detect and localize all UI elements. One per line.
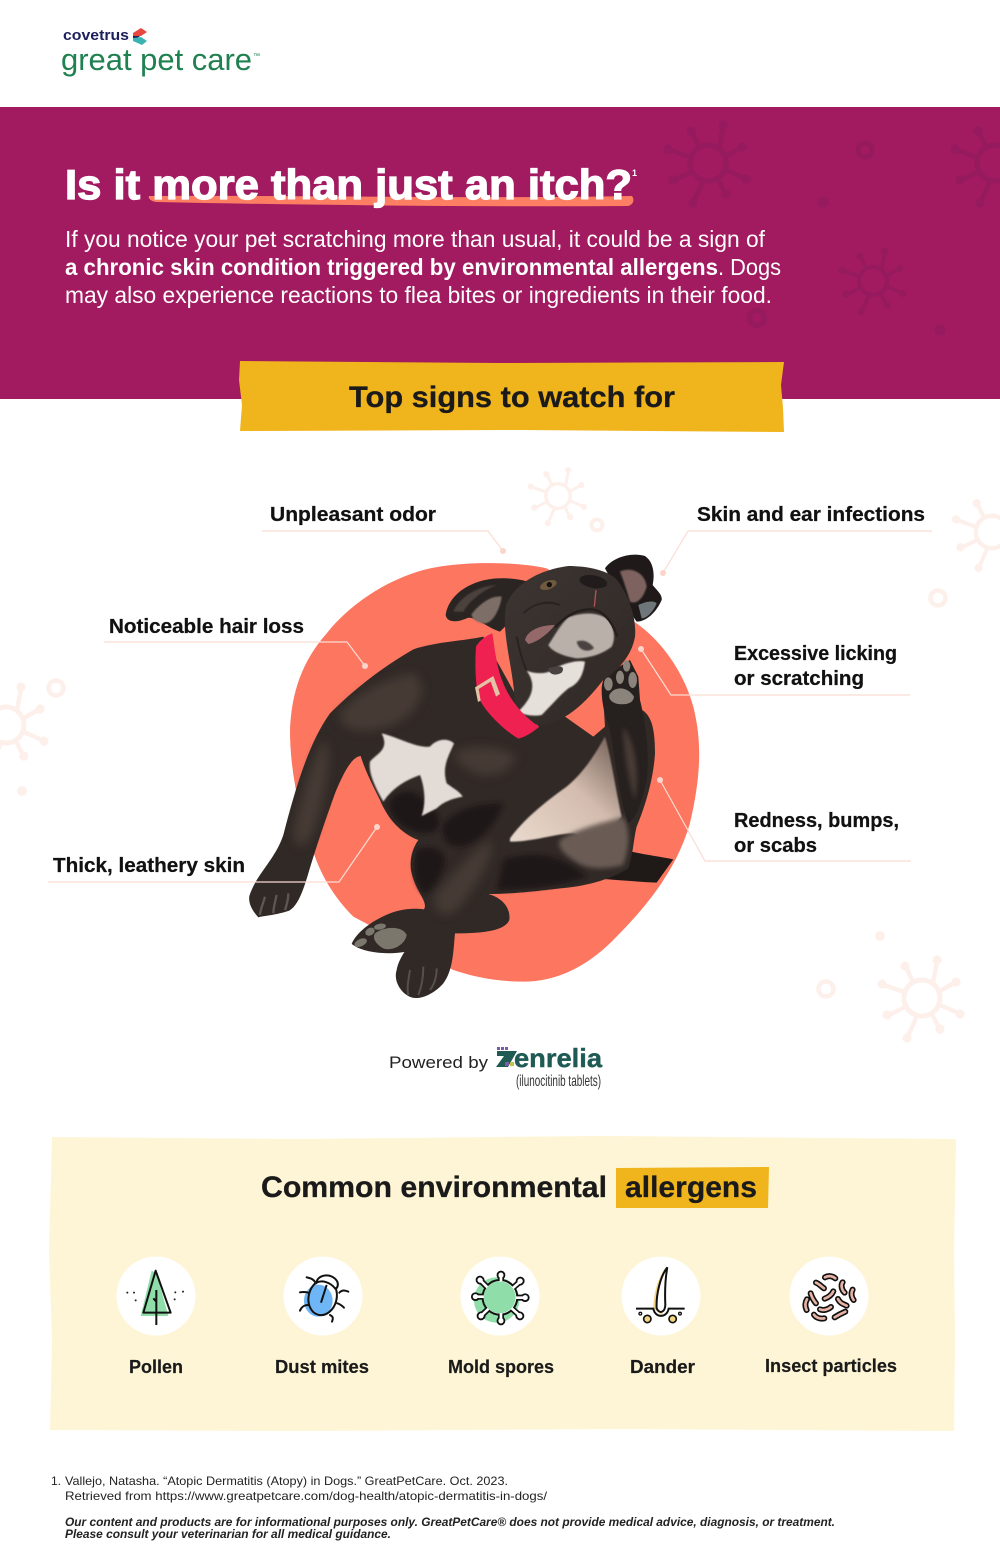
panel: purple hero [0, 107, 1000, 399]
intro paragraph: may also experience reactions to flea bites or ingredients in their food. [65, 282, 772, 308]
intro paragraph [65, 226, 781, 308]
dog: head [505, 566, 635, 725]
dog: chest patch [370, 733, 463, 816]
dog: raised paw pads [604, 660, 637, 704]
callout: redness, bumps: Redness, bumps, [734, 810, 899, 832]
icon: beetle [300, 1275, 348, 1322]
dog: rear leg on right [597, 852, 673, 883]
item: mold spores: Mold spores [448, 1357, 554, 1377]
logo: covetrus great pet care: great pet care [61, 42, 252, 77]
heading: allergens [625, 1171, 757, 1204]
dog: wrinkle shading [517, 603, 560, 671]
dog: body [249, 637, 655, 998]
item: dust mites: Dust mites [275, 1357, 369, 1377]
icon: zenrelia z mark [496, 1047, 517, 1067]
item: pollen [116, 1256, 196, 1377]
icon: spore [474, 1275, 525, 1323]
icon: particles [805, 1276, 854, 1319]
callout: excessive licking [638, 643, 910, 695]
callout: excessive licking: or scratching [734, 668, 864, 690]
item: mold spores [448, 1256, 554, 1377]
dog: right ear [605, 555, 662, 622]
powered by zenrelia: Powered by [389, 1053, 489, 1072]
callout: thick leathery skin: Thick, leathery skin [53, 855, 245, 877]
item: pollen: Pollen [129, 1357, 183, 1377]
dog: body highlights [293, 673, 517, 914]
callout: skin and ear infections [660, 504, 932, 576]
powered by zenrelia: (ilunocitinib tablets) [516, 1073, 601, 1090]
footnotes [51, 1474, 835, 1541]
item: dust mites [275, 1256, 369, 1377]
callout: noticeable hair loss: Noticeable hair loss [109, 616, 304, 638]
dog: raised front leg [602, 660, 648, 823]
callout: redness, bumps: or scabs [734, 835, 817, 857]
dog: mouth [525, 625, 555, 644]
footnotes: Our content and products are for informational purposes only. GreatPetCare® does not provide medical advice, diagnosis, or treatment. [65, 1517, 835, 1529]
heading: Is it more than just an itch? [65, 161, 632, 208]
coral blob [290, 563, 699, 982]
item: dander [622, 1256, 700, 1377]
intro paragraph: . Dogs [718, 254, 781, 280]
callout: excessive licking: Excessive licking [734, 643, 897, 665]
powered by zenrelia: enrelia [514, 1043, 603, 1073]
banner: top signs [239, 361, 784, 432]
dog: lower left paw pads [353, 923, 407, 949]
callout: noticeable hair loss [104, 616, 368, 669]
dog: toes on left paw [260, 893, 288, 915]
panel: common environmental allergens [49, 1136, 956, 1431]
highlight swoosh [149, 196, 633, 206]
footnotes: Vallejo, Natasha. “Atopic Dermatitis (Atopy) in Dogs.” GreatPetCare. Oct. 2023. [65, 1474, 508, 1488]
heading: 1 [632, 168, 637, 178]
intro paragraph: a chronic skin condition triggered by environmental allergens [65, 254, 718, 280]
icon: hair follicle [636, 1267, 685, 1323]
dog: belly [510, 737, 628, 868]
item: dander: Dander [630, 1357, 695, 1377]
dog: collar buckle [475, 676, 500, 702]
dog: nose and eye [578, 573, 608, 590]
logo: covetrus great pet care [61, 28, 260, 77]
callout: unpleasant odor: Unpleasant odor [270, 504, 436, 526]
heading [261, 1167, 769, 1208]
icon: covetrus mark [133, 28, 147, 45]
footnotes: 1. [51, 1474, 61, 1488]
callout: redness, bumps [657, 777, 911, 861]
logo: covetrus great pet care: covetrus [63, 28, 129, 44]
dog: red collar [475, 633, 539, 739]
item: insect particles [765, 1256, 897, 1376]
callout: unpleasant odor [262, 504, 506, 554]
dog illustration [249, 555, 673, 998]
powered by zenrelia [389, 1043, 603, 1090]
background viruses [663, 120, 1000, 336]
banner: top signs: Top signs to watch for [349, 381, 675, 414]
footnotes: Please consult your veterinarian for all medical guidance. [65, 1529, 391, 1541]
callout: thick leathery skin [48, 824, 380, 882]
dog: chin patch [548, 614, 614, 658]
logo: covetrus great pet care: ™ [253, 53, 260, 60]
decorative pale viruses [0, 467, 1000, 1043]
dog: left ear [446, 578, 528, 632]
callout: skin and ear infections: Skin and ear infections [697, 504, 925, 526]
icon: tree [126, 1271, 184, 1325]
highlight [616, 1167, 769, 1208]
footnotes: Retrieved from https://www.greatpetcare.com/dog-health/atopic-dermatitis-in-dogs/ [65, 1489, 548, 1503]
dog: dark shadows [389, 792, 587, 893]
item: insect particles: Insect particles [765, 1356, 897, 1376]
heading: Common environmental [261, 1171, 607, 1204]
dog: throat patch [518, 661, 585, 716]
dog: toes on front paw [408, 967, 437, 995]
intro paragraph: If you notice your pet scratching more than usual, it could be a sign of [65, 226, 766, 252]
